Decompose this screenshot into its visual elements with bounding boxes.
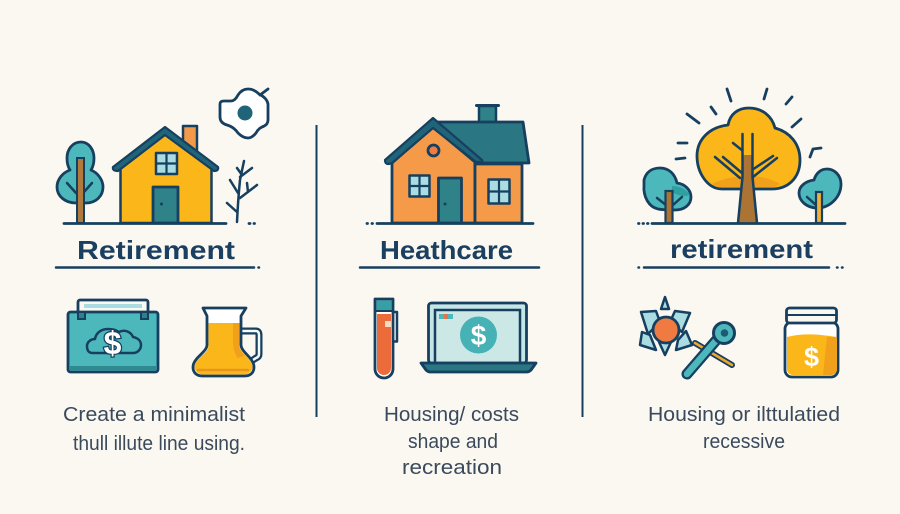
icon: bracket ray	[810, 148, 821, 157]
panel: second retirement column	[638, 89, 845, 453]
heading: retirement: retirement	[670, 234, 813, 264]
icon: fried-egg shaped sun badge	[220, 89, 268, 138]
ground line	[64, 222, 254, 225]
icon: sun rays	[676, 89, 801, 159]
text block: retirement caption	[63, 403, 245, 455]
heading underline	[638, 266, 842, 269]
text block: healthcare caption: shape and	[408, 430, 498, 453]
panel: healthcare column	[360, 106, 539, 479]
text block: healthcare caption: Housing/ costs	[384, 403, 519, 426]
text block: retirement caption: Create a minimalist	[63, 403, 245, 426]
icon: flower and wrench tools	[640, 297, 734, 374]
heading underline	[360, 266, 539, 269]
panel: retirement house column	[56, 89, 268, 455]
text block: retirement caption: thull illute line using.	[73, 432, 245, 455]
icon: teal money bag: $	[104, 325, 122, 361]
text block: healthcare caption	[384, 403, 519, 479]
icon: large yellow tree	[697, 108, 800, 223]
icon: test tube	[375, 299, 397, 378]
text block: healthcare caption: recreation	[402, 456, 502, 479]
icon: yellow jug	[193, 308, 259, 376]
text block: third caption: Housing or ilttulatied	[648, 403, 840, 426]
icon: teal money bag	[68, 300, 158, 372]
icon: laptop with dollar coin: $	[471, 320, 487, 351]
text block: third caption: recessive	[703, 430, 785, 453]
ground line	[367, 222, 533, 225]
icon: laptop with dollar coin	[421, 303, 536, 372]
icon: jar with dollar	[785, 308, 838, 377]
icon: orange house	[385, 106, 529, 223]
text block: third caption	[648, 403, 840, 453]
heading: Retirement: Retirement	[77, 235, 235, 265]
icon: small tree left	[644, 168, 691, 223]
icon: small tree right	[799, 169, 841, 223]
heading underline	[56, 266, 259, 269]
ground line	[638, 222, 845, 225]
icon: yellow house	[113, 126, 218, 223]
icon: left teal tree	[57, 142, 103, 223]
icon: jar with dollar: $	[804, 342, 819, 372]
icon: bare tree	[227, 161, 257, 222]
heading: Heathcare: Heathcare	[380, 235, 513, 265]
